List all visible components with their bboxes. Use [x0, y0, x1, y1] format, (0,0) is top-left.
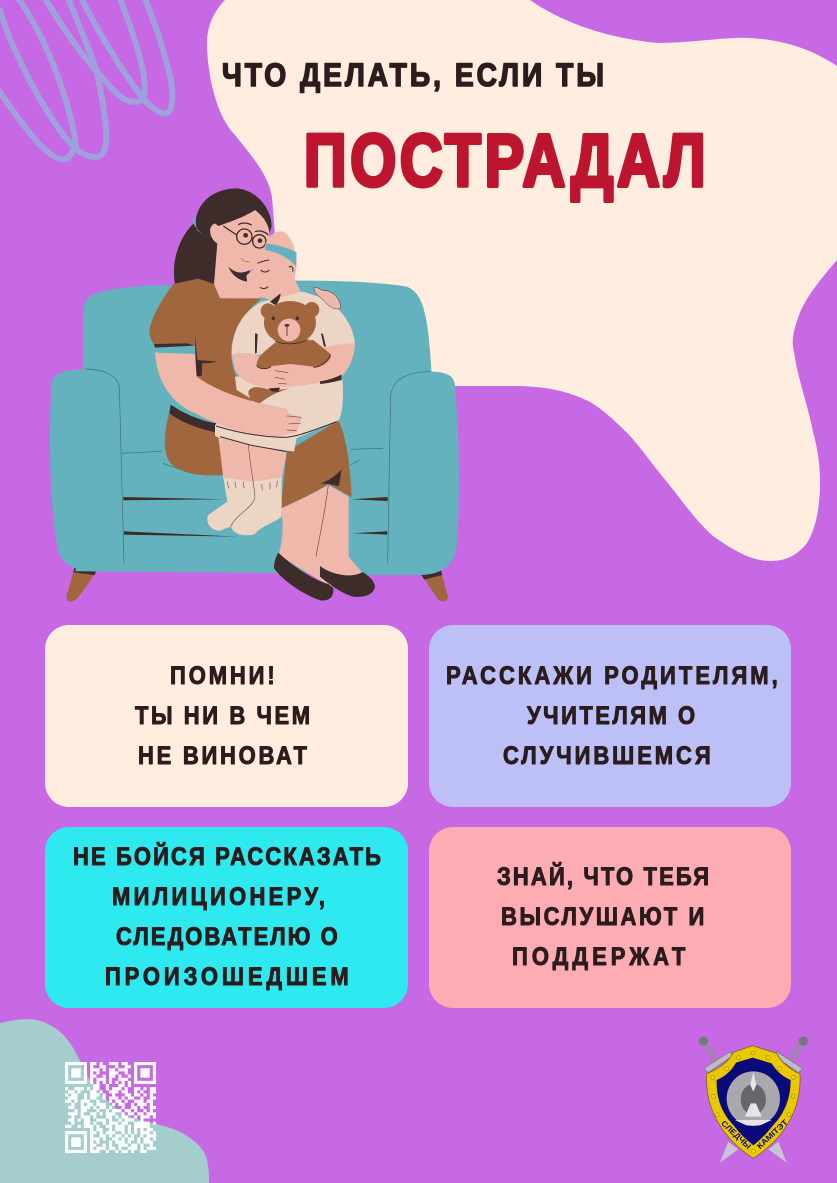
card: you will be heard — [429, 827, 791, 1008]
shield motto — [719, 1118, 790, 1151]
child's legs — [218, 437, 287, 483]
card: you will be heard: ВЫСЛУШАЮТ И — [501, 903, 704, 930]
card: tell parents: УЧИТЕЛЯМ О — [527, 702, 695, 729]
card: remember: ТЫ НИ В ЧЕМ — [135, 702, 310, 729]
mother's skirt — [281, 421, 352, 508]
armchair — [50, 281, 459, 602]
mother's dress — [149, 279, 262, 407]
child's head — [246, 231, 303, 299]
child's socks — [207, 477, 282, 535]
child's hand on teddy — [274, 364, 317, 387]
card: do not be afraid: ПРОИЗОШЕДШЕМ — [105, 963, 349, 990]
card: tell parents: РАССКАЖИ РОДИТЕЛЯМ, — [446, 662, 778, 689]
cream background blob — [207, 0, 837, 561]
card: tell parents — [429, 625, 791, 807]
crossed swords — [699, 1036, 808, 1163]
glasses — [223, 223, 268, 248]
heading: main word: ПОСТРАДАЛ — [304, 120, 706, 203]
card: you will be heard: ПОДДЕРЖАТ — [512, 943, 686, 970]
mother's lap and belt — [165, 410, 223, 475]
mother's hair — [174, 188, 272, 284]
card: do not be afraid: НЕ БОЙСЯ РАССКАЗАТЬ — [73, 842, 381, 870]
mother's face and neck — [210, 210, 269, 299]
heading: intro line: ЧТО ДЕЛАТЬ, ЕСЛИ ТЫ — [222, 58, 604, 93]
card: do not be afraid: СЛЕДОВАТЕЛЮ О — [116, 923, 338, 950]
illustration: mother hugging child on armchair — [50, 188, 459, 602]
QR code — [65, 1064, 156, 1151]
card: tell parents: СЛУЧИВШЕМСЯ — [503, 742, 711, 769]
jaw shadow — [228, 267, 250, 282]
card: do not be afraid — [45, 827, 408, 1008]
card: remember: НЕ ВИНОВАТ — [138, 742, 308, 769]
child's torso and shirt — [215, 373, 343, 452]
mother and child figures — [149, 188, 375, 601]
teddy bear — [257, 301, 331, 369]
shield — [707, 1046, 800, 1158]
decorative scribble — [0, 0, 172, 159]
shield motto: СЛЕДЧЫ — [719, 1119, 753, 1151]
child's arms — [232, 343, 355, 388]
mother's arm — [155, 352, 302, 437]
child's hand on mother's shoulder — [314, 287, 341, 309]
state emblem — [727, 1071, 780, 1126]
shield motto: КАМІТЭТ — [755, 1118, 790, 1151]
chin shadow — [270, 293, 281, 305]
mother's legs — [278, 485, 363, 587]
card: do not be afraid: МИЛИЦИОНЕРУ, — [112, 883, 325, 910]
card: remember: ПОМНИ! — [170, 662, 275, 689]
card: remember — [45, 625, 408, 807]
child's upper shirt — [232, 292, 355, 355]
shoes — [320, 566, 375, 597]
emblem: investigative committee shield with swords — [699, 1036, 808, 1163]
card: you will be heard: ЗНАЙ, ЧТО ТЕБЯ — [497, 862, 709, 890]
teal corner blob — [0, 1019, 209, 1183]
shield rivets — [711, 1051, 795, 1153]
